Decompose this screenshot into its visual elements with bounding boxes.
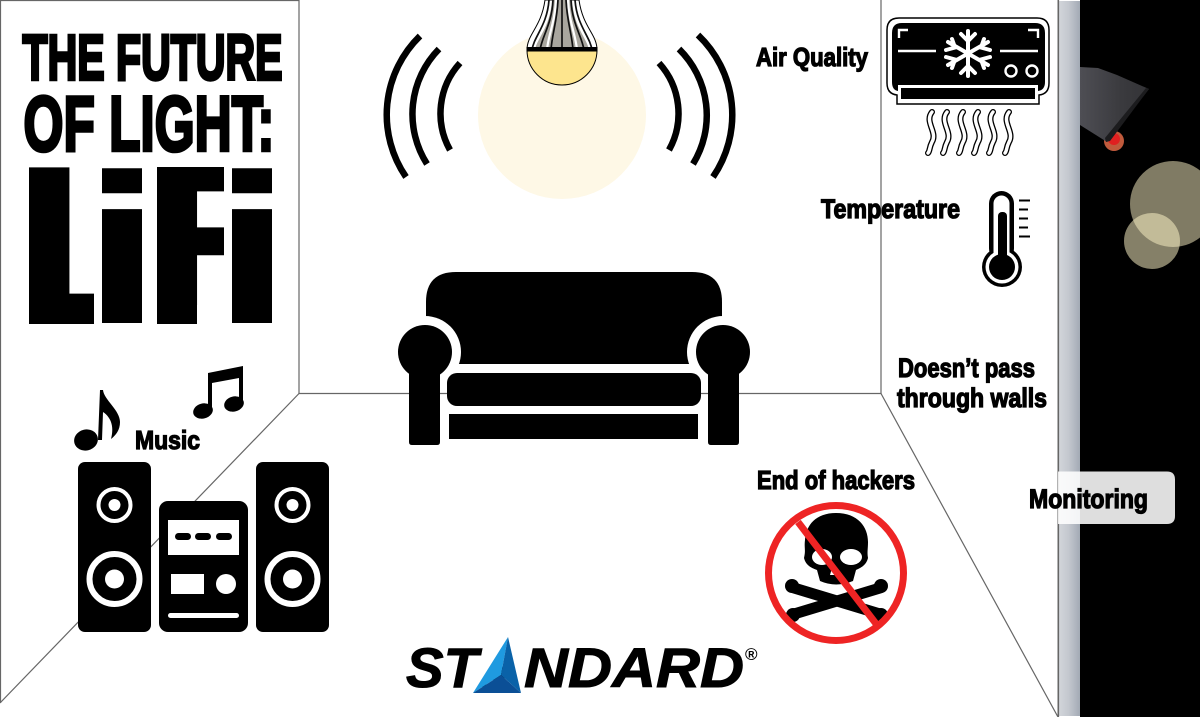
title bbox=[15, 22, 289, 368]
logo: standard: NDARD bbox=[524, 636, 744, 699]
title line 1: THE FUTURE bbox=[22, 22, 282, 94]
left speaker bbox=[78, 462, 151, 632]
icon: sofa bbox=[389, 272, 759, 445]
title LiFi: i bbox=[216, 134, 288, 366]
title LiFi bbox=[29, 167, 272, 324]
logo triangle bbox=[473, 637, 521, 693]
title line 2: OF LIGHT: bbox=[24, 80, 274, 168]
callout: monitoring: Monitoring bbox=[1029, 484, 1148, 514]
projector on dark wall bbox=[1080, 67, 1149, 151]
label: temperature: Temperature bbox=[821, 194, 960, 224]
logo: standard bbox=[406, 636, 758, 699]
title LiFi: i bbox=[86, 134, 158, 366]
center unit bbox=[159, 501, 248, 632]
light spots on dark wall bbox=[1124, 161, 1200, 269]
icon: light bulb bbox=[526, 0, 598, 85]
icon: signal waves right bbox=[659, 35, 732, 177]
dark side wall bbox=[1058, 0, 1200, 717]
label: end of hackers: End of hackers bbox=[757, 465, 915, 495]
callout: monitoring bbox=[1029, 472, 1175, 524]
snowflake bbox=[946, 31, 990, 76]
logo: standard: A bbox=[479, 652, 509, 696]
icon: thermometer bbox=[982, 191, 1030, 287]
label: doesn't pass through walls bbox=[897, 353, 1047, 413]
logo: standard: ® bbox=[745, 645, 758, 664]
label: air quality: Air Quality bbox=[756, 42, 868, 72]
right speaker bbox=[256, 462, 329, 632]
label: music: Music bbox=[135, 425, 200, 455]
icon: music notes beamed bbox=[191, 366, 246, 421]
label: doesn't pass through walls: through walls bbox=[897, 383, 1047, 413]
icon: no hackers skull bbox=[768, 506, 904, 640]
title LiFi: F bbox=[143, 124, 289, 344]
title LiFi: L bbox=[15, 124, 163, 368]
icon: signal waves left bbox=[387, 36, 460, 177]
icon: music note single bbox=[72, 390, 120, 453]
icon: stereo system bbox=[78, 462, 329, 632]
logo: standard: ST bbox=[406, 636, 483, 699]
air flow lines bbox=[928, 112, 1011, 153]
label: doesn't pass through walls: Doesn’t pass bbox=[898, 353, 1035, 383]
icon: air conditioner bbox=[887, 18, 1049, 153]
light glow bbox=[478, 31, 646, 199]
